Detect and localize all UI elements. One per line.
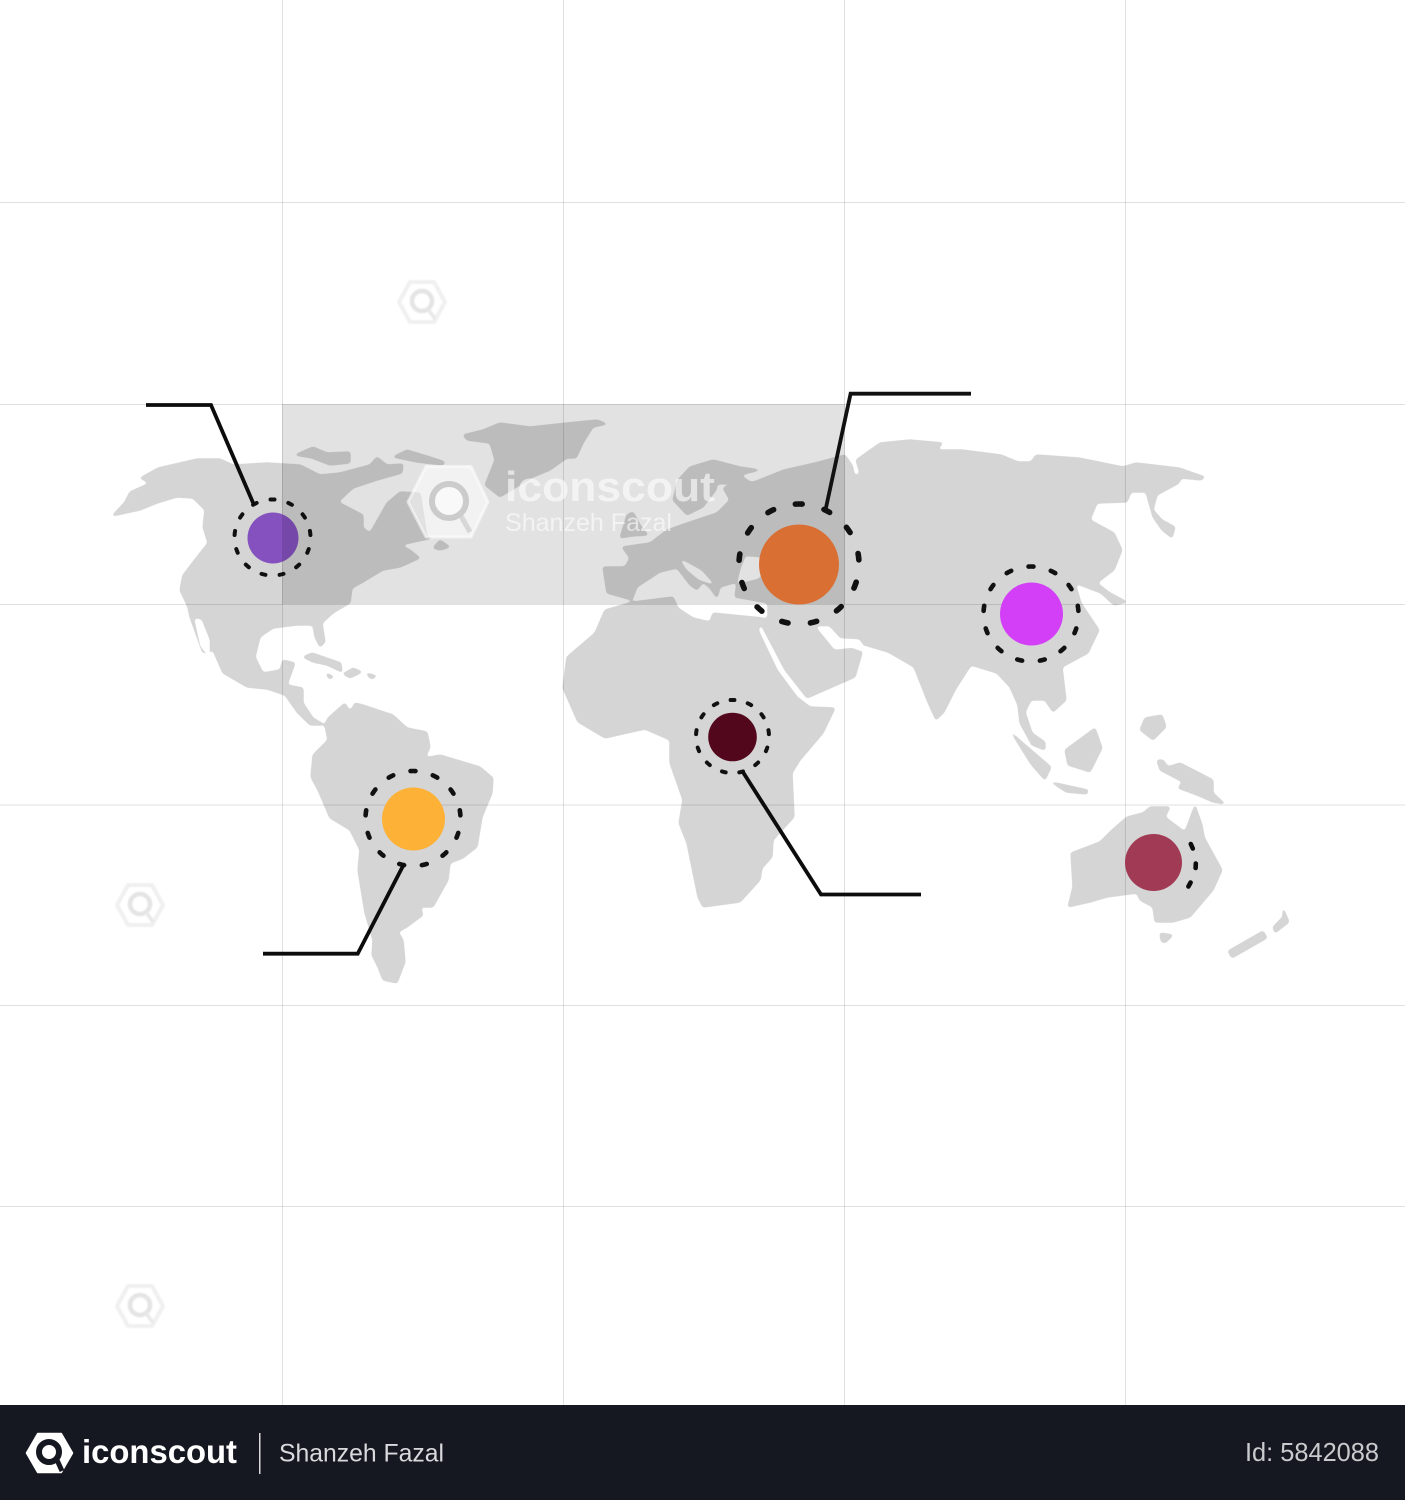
watermark: central logo: Shanzeh Fazal (505, 509, 672, 537)
watermark: small logo top (399, 282, 445, 322)
world map (112, 420, 1289, 983)
brand name: iconscout (82, 1433, 237, 1470)
landmass: Australia (1068, 805, 1222, 922)
watermark: central logo: iconscout (505, 463, 715, 510)
marker: Europe (orange) (739, 394, 971, 624)
islands: Southeast Asia (1011, 715, 1225, 804)
author name: Shanzeh Fazal (279, 1440, 444, 1468)
continents and islands (112, 420, 1289, 983)
watermark: central logo (408, 463, 715, 537)
divider (259, 1433, 260, 1474)
islands: Tasmania and New Zealand (1160, 908, 1289, 958)
landmass: Greenland (463, 420, 607, 497)
watermark: small logo lower left (117, 1286, 163, 1326)
inland seas (195, 557, 868, 656)
landmass: British Isles (620, 512, 648, 538)
shaded highlight band (282, 404, 845, 604)
marker: North America (purple) (146, 405, 310, 576)
landmass: Scandinavia (673, 460, 760, 515)
marker: South America (yellow) (263, 771, 460, 954)
marker: Asia (magenta) (984, 566, 1078, 662)
landmass: Africa (563, 597, 835, 907)
arctic and Caribbean islands (295, 447, 450, 679)
watermark: small logo middle left (117, 885, 163, 925)
marker: Australia (rose) (1125, 834, 1196, 891)
asset id: Id: 5842088 (1245, 1437, 1379, 1467)
landmass: Eurasia (603, 440, 1205, 750)
marker: Africa (dark maroon) (696, 700, 921, 894)
landmass: North and Central America (112, 457, 433, 725)
footer bar (0, 1405, 1405, 1500)
landmass: South America (311, 703, 493, 983)
icon: iconscout logo (27, 1434, 72, 1472)
